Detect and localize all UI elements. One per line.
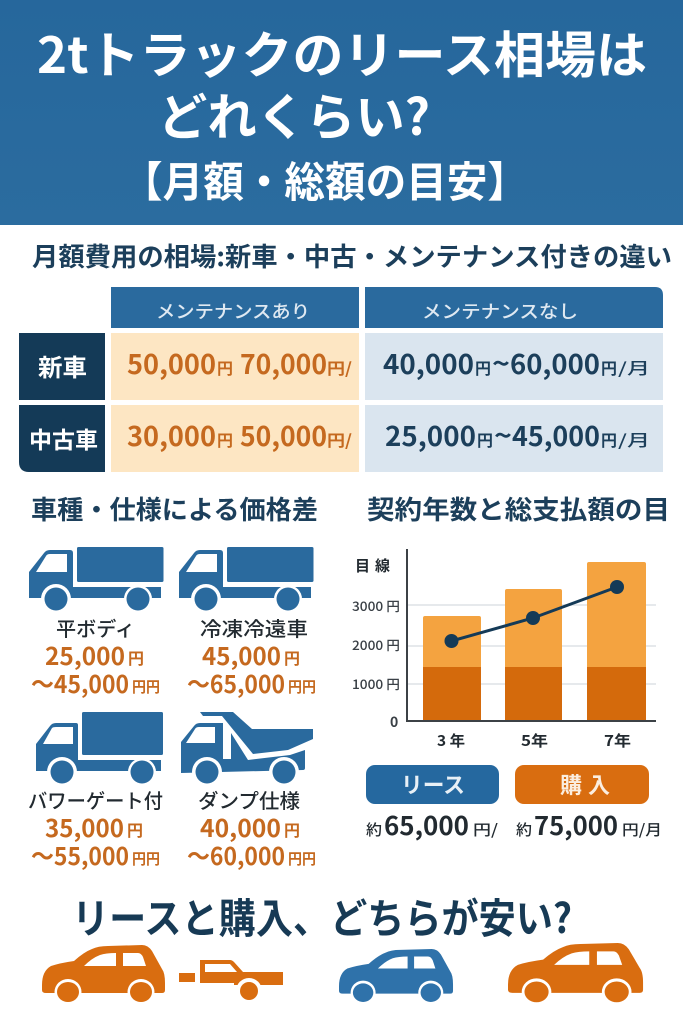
lease price — [366, 806, 498, 843]
bar: 3 years — [423, 616, 481, 720]
icon: dash — [179, 973, 195, 982]
cell: used with maintenance: 円/ — [327, 427, 352, 451]
cell: used without maintenance — [365, 405, 663, 472]
row label: used — [19, 405, 105, 472]
label: ダンプ仕様 — [198, 785, 300, 814]
bar chart — [352, 549, 656, 751]
lease price: 円/ — [473, 819, 498, 840]
lease price: 約 — [366, 819, 382, 840]
heading: contract years: 契約年数と総支払額の目 — [367, 490, 670, 527]
y-axis labels: 3000 円 — [352, 596, 400, 615]
price range: 円 — [127, 817, 143, 841]
cell: new without maintenance — [365, 333, 663, 400]
table header: with maintenance: メンテナンスあり — [156, 298, 310, 324]
y-axis labels — [352, 555, 400, 732]
heading: vehicle types: 車種・仕様による価格差 — [31, 490, 318, 527]
vehicle type: dump — [181, 712, 316, 873]
cell: used with maintenance: 30,000 — [127, 415, 216, 454]
title line 2: どれくらい? — [158, 78, 430, 150]
price table — [19, 287, 663, 472]
purchase price: 円/月 — [622, 819, 662, 840]
price range: ～55,000 — [31, 838, 129, 873]
row label: new: 新車 — [38, 348, 87, 383]
x-axis labels: 7年 — [604, 730, 631, 751]
lease button — [366, 765, 499, 804]
label: 冷凍冷遠車 — [200, 613, 308, 642]
purchase button — [515, 765, 649, 804]
cell: new without maintenance: 40,000 — [383, 343, 474, 382]
price range: 円円 — [132, 676, 160, 697]
purchase price: 75,000 — [534, 806, 618, 843]
price range: 円円 — [132, 848, 160, 869]
y-axis labels: 0 — [390, 712, 398, 732]
icon: dump truck — [181, 712, 313, 787]
cell: used without maintenance: 円 — [601, 427, 617, 451]
cell: used with maintenance: 50,000 — [240, 415, 327, 454]
icon: truck — [29, 547, 164, 614]
price range: 円 — [284, 817, 300, 841]
cell: used without maintenance: 円 — [477, 427, 493, 451]
price range — [187, 810, 316, 873]
price range: 円 — [284, 645, 300, 669]
y-axis labels: 2000 円 — [352, 635, 400, 654]
icon: orange car — [42, 945, 165, 1005]
vehicle type: refrigerated — [179, 547, 316, 701]
cell: new without maintenance: ~ — [492, 344, 510, 381]
row label: new — [19, 333, 105, 400]
cell: used without maintenance: ~ — [494, 416, 512, 453]
icon: orange car — [508, 943, 643, 1005]
icon: truck — [179, 547, 314, 614]
cell: new without maintenance: 円 — [601, 355, 617, 379]
cell: new without maintenance: 60,000 — [510, 343, 600, 382]
purchase button: 購入 — [560, 768, 610, 800]
cell: new with maintenance: 円/ — [327, 355, 352, 379]
price range: ～45,000 — [31, 666, 129, 701]
price range — [187, 638, 316, 701]
x-axis labels: 3 年 — [437, 730, 465, 751]
cell: new without maintenance: /月 — [618, 355, 650, 379]
trend line — [444, 580, 624, 648]
icon: truck with tall box — [36, 712, 163, 787]
title line 1: 2tトラックのリース相場は — [37, 16, 647, 88]
x-axis labels: 5年 — [521, 730, 548, 751]
bar: 7 years — [587, 562, 646, 720]
table header: with maintenance — [111, 287, 359, 328]
row label: used: 中古車 — [29, 421, 98, 455]
cell: used without maintenance: 45,000 — [512, 415, 600, 454]
price range — [31, 810, 160, 873]
heading: monthly cost: 月額費用の相場:新車・中古・メンテナンス付きの違い — [32, 237, 672, 274]
header banner — [0, 0, 683, 225]
price range: 円 — [128, 645, 144, 669]
title line 3: 【月額・総額の目安】 — [122, 149, 528, 210]
cell: used without maintenance: 25,000 — [385, 415, 476, 454]
table header: without maintenance — [365, 287, 663, 328]
y-axis labels: 1000 円 — [352, 674, 400, 693]
vehicle type: power gate — [28, 712, 163, 873]
vehicle type: flat body — [29, 547, 164, 701]
label: 平ボディ — [56, 613, 135, 642]
x-axis labels — [437, 730, 631, 751]
lease price: 65,000 — [384, 806, 469, 843]
cell: new without maintenance: 円 — [475, 355, 491, 379]
heading: lease vs purchase: リースと購入、どちらが安い? — [72, 885, 572, 945]
price range: 円円 — [288, 676, 316, 697]
bar: 5 years — [505, 589, 562, 720]
label: バワーゲート付 — [28, 785, 163, 814]
icon: pickup truck — [200, 960, 283, 1004]
price range: 35,000 — [45, 810, 124, 845]
price range: 円円 — [288, 848, 316, 869]
icon: blue car — [339, 949, 453, 1005]
price range: 40,000 — [200, 810, 281, 845]
price range: ～65,000 — [187, 666, 285, 701]
price range: 45,000 — [202, 638, 281, 673]
lease button: リース — [401, 768, 465, 800]
table header: without maintenance: メンテナンスなし — [422, 298, 578, 324]
cell: used with maintenance — [111, 405, 359, 472]
cell: new with maintenance — [111, 333, 359, 400]
purchase price: 約 — [516, 819, 532, 840]
cell: new with maintenance: 円 — [217, 355, 233, 379]
cell: new with maintenance: 50,000 — [127, 343, 216, 382]
purchase price — [516, 806, 662, 843]
cell: new with maintenance: 70,000 — [240, 343, 327, 382]
price range: 25,000 — [45, 638, 125, 673]
y-axis labels: 目線 — [355, 555, 390, 576]
cell: used with maintenance: 円 — [217, 427, 233, 451]
price range — [31, 638, 160, 701]
cell: used without maintenance: /月 — [618, 427, 650, 451]
price range: ～60,000 — [187, 838, 285, 873]
